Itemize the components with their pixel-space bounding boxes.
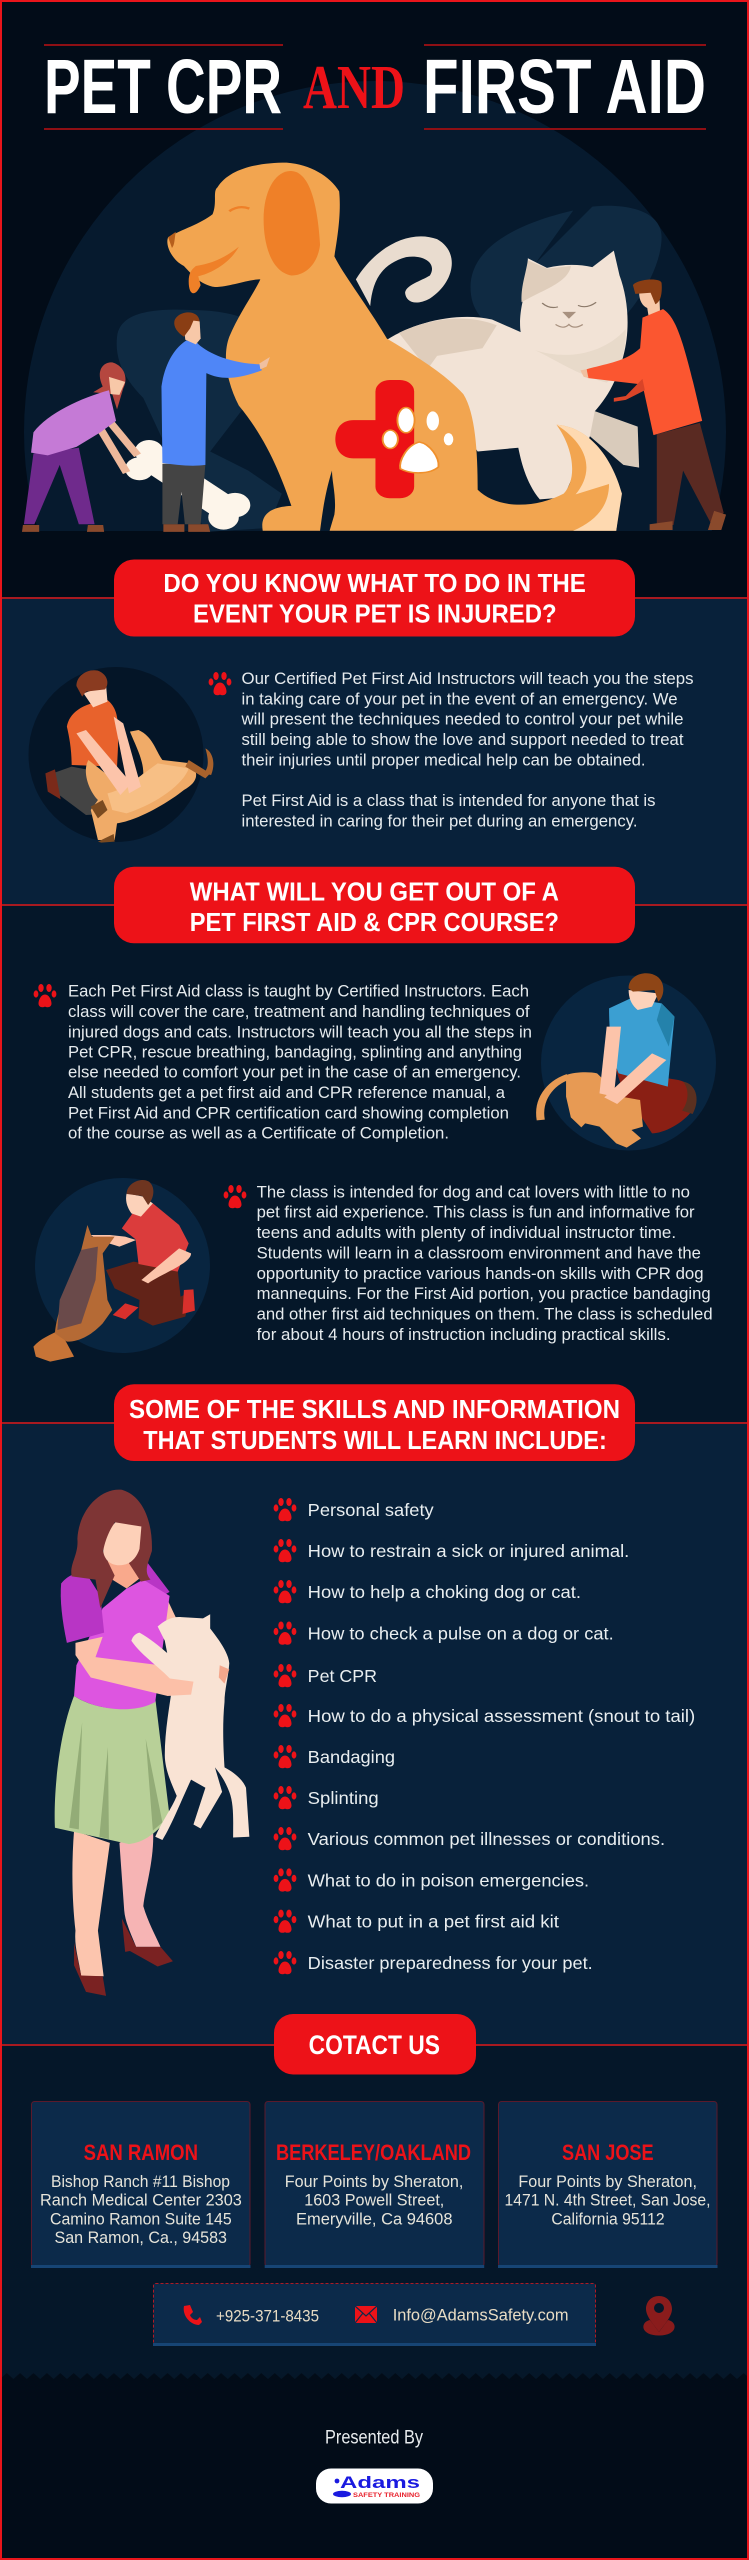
icon: location pin (643, 2296, 675, 2336)
banner: what will you get (114, 867, 635, 943)
text block: intro: their injuries until proper medical help can be obtained. (242, 750, 646, 769)
text block: intro: Our Certified Pet First Aid Instructors will teach you the steps (242, 669, 694, 688)
text block: intro: Pet First Aid is a class that is intended for anyone that is (242, 791, 656, 810)
card: San Ramon: SAN RAMON (84, 2140, 198, 2165)
item: pulse: How to check a pulse on a dog or cat. (308, 1624, 614, 1644)
banner: skills: SOME OF THE SKILLS AND INFORMATION (129, 1394, 620, 1424)
item: illnesses: Various common pet illnesses or conditions. (308, 1829, 665, 1849)
banner: skills: THAT STUDENTS WILL LEARN INCLUDE: (143, 1425, 607, 1455)
text block: course details: else needed to comfort your pet in the case of an emergency. (68, 1063, 521, 1082)
text block: who the class is for: mannequins. For the First Aid portion, you practice bandaging (257, 1284, 711, 1303)
text block: course details: of the course as well as a Certificate of Completion. (68, 1124, 449, 1143)
card: Berkeley/Oakland: Emeryville, Ca 94608 (296, 2209, 452, 2228)
panel: footer background (0, 2379, 749, 2560)
presented by: Presented By (325, 2428, 423, 2448)
item: poison: What to do in poison emergencies. (308, 1870, 589, 1890)
card: San Ramon: Camino Ramon Suite 145 (50, 2209, 232, 2228)
text block: intro (209, 669, 694, 830)
illustration: man giving cat CPR (540, 973, 716, 1150)
logo: Adams Safety Training (316, 2468, 433, 2504)
illustration: man with dog (33, 1178, 210, 1362)
hero illustration (22, 81, 726, 532)
item: first aid kit: What to put in a pet first aid kit (308, 1912, 559, 1932)
text block: who the class is for: for about 4 hours of instruction including practical skills. (257, 1325, 671, 1344)
man in blue coat (161, 312, 270, 532)
text block: who the class is for: pet first aid experience. This class is fun and informative for (257, 1203, 695, 1222)
text block: intro: interested in caring for their pet during an emergency. (242, 811, 638, 830)
text block: course details (34, 982, 532, 1143)
panel: injured pet section background (0, 598, 749, 905)
card: San Ramon: Ranch Medical Center 2303 (40, 2191, 242, 2210)
banner: contact us (274, 2014, 476, 2074)
contact bar (153, 2284, 596, 2346)
card: Berkeley/Oakland (265, 2102, 484, 2268)
item: disaster: Disaster preparedness for your pet. (308, 1953, 593, 1973)
phone number: +925-371-8435 (216, 2306, 319, 2326)
text block: course details: class will cover the care, treatment and handling techniques of (68, 1002, 530, 1021)
text block: course details: Pet First Aid and CPR certification card showing completion (68, 1103, 509, 1122)
banner: do you know (114, 560, 635, 636)
item: choking: How to help a choking dog or cat. (308, 1582, 581, 1602)
card: San Ramon (31, 2102, 250, 2268)
man in orange coat (580, 279, 726, 530)
text block: who the class is for: teens and adults with plenty of individual instructor time. (257, 1223, 676, 1242)
text block: who the class is for (224, 1182, 713, 1344)
card: San Jose: Four Points by Sheraton, (518, 2172, 697, 2191)
card: Berkeley/Oakland: Four Points by Sheraton, (285, 2172, 463, 2191)
icon: paw (224, 1185, 246, 1208)
card: San Jose: California 95112 (551, 2209, 665, 2228)
icon: paw (34, 984, 56, 1007)
text block: course details: injured dogs and cats. Instructors will teach you all the steps in (68, 1022, 532, 1041)
logo: Adams Safety Training: SAFETY TRAINING (353, 2492, 420, 2499)
item: pet cpr (274, 1664, 377, 1687)
panel: contact section background (0, 2045, 749, 2379)
text block: who the class is for: The class is intended for dog and cat lovers with little to no (257, 1182, 690, 1201)
item: bandaging: Bandaging (308, 1747, 395, 1767)
text block: course details: All students get a pet first aid and CPR reference manual, a (68, 1083, 506, 1102)
icon: phone (184, 2305, 202, 2325)
banner: skills (114, 1384, 635, 1461)
hero backdrop circle (24, 81, 726, 531)
text block: course details: Pet CPR, rescue breathing, bandaging, splinting and anything (68, 1042, 522, 1061)
item: splinting: Splinting (308, 1788, 379, 1808)
item: restrain: How to restrain a sick or injured animal. (308, 1541, 629, 1561)
list: skills (274, 1498, 695, 1974)
text block: who the class is for: and other first aid techniques on them. The class is scheduled (257, 1304, 713, 1324)
email: Info@AdamsSafety.com (393, 2305, 569, 2324)
banner: do you know: DO YOU KNOW WHAT TO DO IN THE (163, 568, 586, 598)
item: personal safety: Personal safety (308, 1500, 434, 1520)
text block: who the class is for: opportunity to practice various hands-on skills with CPR dog (257, 1264, 704, 1283)
text block: intro: will present the techniques needed to control your pet while (241, 710, 684, 729)
item: personal safety (274, 1498, 434, 1521)
text block: course details: Each Pet First Aid class is taught by Certified Instructors. Each (68, 982, 529, 1001)
bone (125, 440, 250, 530)
card: San Ramon: Bishop Ranch #11 Bishop (51, 2172, 230, 2191)
text block: intro: still being able to show the love and support needed to treat (242, 730, 684, 749)
woman in purple (22, 362, 138, 532)
illustration: man giving dog CPR (28, 667, 213, 843)
logo: Adams Safety Training: Adams (340, 2473, 420, 2492)
panel: header background (0, 0, 749, 598)
banner: do you know: EVENT YOUR PET IS INJURED? (193, 598, 557, 628)
title: AND (303, 54, 405, 122)
card: San Jose: SAN JOSE (562, 2140, 654, 2165)
cat (356, 236, 639, 499)
dog (167, 163, 622, 531)
banner: what will you get: WHAT WILL YOU GET OUT OF A (190, 877, 559, 907)
title: PET CPR (44, 44, 282, 130)
illustration: woman holding cat (55, 1490, 249, 1996)
text block: intro: in taking care of your pet in the event of an emergency. We (242, 689, 678, 708)
panel: skills section background (0, 1423, 749, 2045)
background leaves (117, 206, 662, 532)
item: assessment: How to do a physical assessment (snout to tail) (308, 1706, 695, 1726)
item: pet cpr: Pet CPR (308, 1666, 377, 1686)
text block: who the class is for: Students will learn in a classroom environment and have the (257, 1243, 701, 1262)
card: San Jose (498, 2102, 718, 2268)
card: Berkeley/Oakland: 1603 Powell Street, (304, 2191, 444, 2210)
panel: course section background (0, 905, 749, 1423)
item: bandaging (274, 1745, 395, 1768)
card: Berkeley/Oakland: BERKELEY/OAKLAND (276, 2140, 471, 2165)
paw on dog (383, 408, 453, 473)
icon: mail (355, 2306, 377, 2323)
card: San Jose: 1471 N. 4th Street, San Jose, (504, 2191, 710, 2210)
icon: paw (209, 672, 231, 695)
title (44, 44, 706, 130)
cat being held (131, 1614, 249, 1840)
card: San Ramon: San Ramon, Ca., 94583 (54, 2228, 227, 2247)
banner: what will you get: PET FIRST AID & CPR COURSE? (190, 907, 559, 937)
item: splinting (274, 1786, 379, 1809)
banner: contact us: COTACT US (309, 2030, 440, 2060)
